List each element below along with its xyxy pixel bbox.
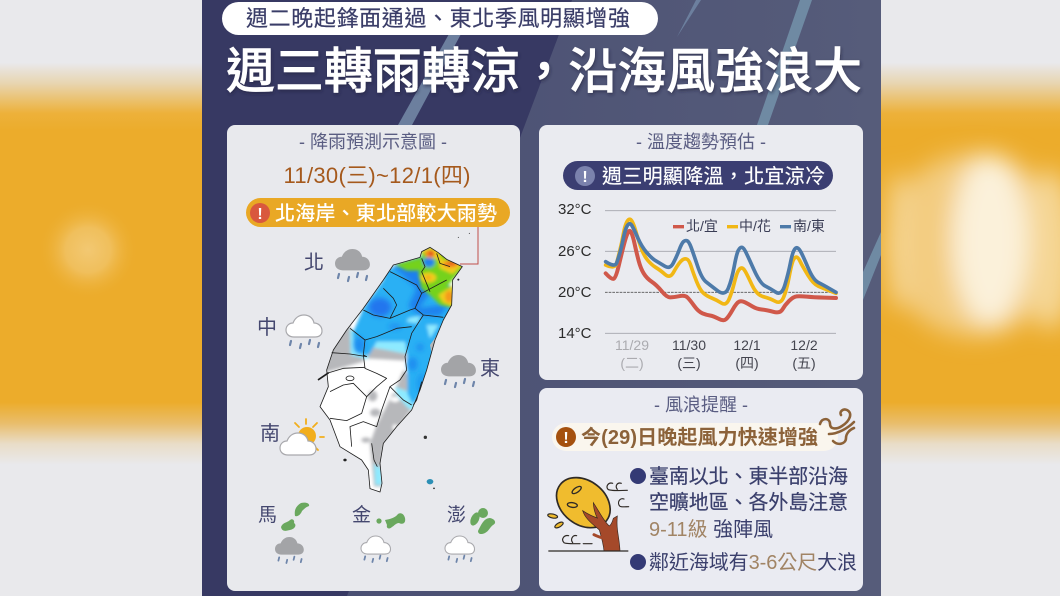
subtitle pill: 週二晚起鋒面通過、東北季風明顯增強 — [246, 6, 630, 31]
icon: central rain cloud — [286, 315, 322, 348]
panel: temperature trend — [539, 125, 863, 380]
date labels: (五) — [792, 355, 816, 371]
date labels: 12/1 — [733, 337, 761, 353]
map of Taiwan with rainfall — [313, 233, 470, 497]
date labels: 11/29 — [615, 337, 649, 353]
chart legend: 南/東 — [793, 218, 825, 234]
icon: wind swirl — [820, 409, 854, 444]
icon: east rain cloud — [441, 355, 476, 387]
axis labels: 26°C — [558, 243, 592, 260]
rainfall alert pill: 北海岸、東北部較大雨勢 — [275, 202, 497, 225]
poster background — [202, 0, 881, 596]
wind warning bullet one: 臺南以北、東半部沿海 — [649, 465, 848, 488]
wind warning bullet one — [630, 465, 848, 541]
panel: wind and waves — [539, 388, 863, 591]
icon: north rain cloud — [335, 249, 370, 281]
series: central/Hualien — [606, 219, 836, 304]
subtitle pill — [222, 2, 658, 35]
rainfall dates: 11/30(三)~12/1(四) — [284, 163, 470, 188]
axis labels — [558, 201, 592, 342]
label: north: 北 — [304, 251, 324, 274]
wind panel heading: - 風浪提醒 - — [654, 395, 748, 415]
series: south/Taitung — [606, 224, 836, 293]
icon: Matsu islands — [281, 503, 309, 531]
date labels: (三) — [677, 355, 701, 371]
wind warning bullet one: 9-11級 強陣風 — [649, 518, 773, 541]
rainfall panel heading: - 降雨預測示意圖 - — [299, 132, 447, 152]
axis labels: 20°C — [558, 284, 592, 301]
icon: tree in wind — [547, 467, 629, 551]
wind alert pill: 今(29)日晚起風力快速增強 — [581, 425, 818, 449]
icon: Penghu cloud — [445, 536, 475, 562]
label: south: 南 — [260, 422, 280, 445]
chart legend — [673, 218, 825, 234]
icon: Kinmen cloud — [361, 536, 391, 562]
temperature alert pill: 週三明顯降溫，北宜涼冷 — [602, 165, 825, 188]
icon: Penghu islands — [468, 508, 495, 534]
temperature alert pill: ! — [582, 169, 588, 186]
chart grid lines — [605, 211, 836, 333]
axis labels: 14°C — [558, 325, 592, 342]
label: central: 中 — [257, 316, 277, 339]
label: Kinmen: 金 — [352, 504, 371, 526]
rainfall alert pill — [246, 198, 510, 227]
wind warning bullet one: 空曠地區、各外島注意 — [649, 491, 848, 514]
chart legend: 中/花 — [739, 218, 771, 234]
chart legend: 北/宜 — [686, 218, 718, 234]
series: north/Yilan — [606, 231, 836, 320]
icon: Matsu cloud — [275, 537, 304, 563]
icon: Kinmen islands — [376, 513, 405, 528]
date labels: (二) — [620, 355, 644, 371]
date labels: 11/30 — [672, 337, 706, 353]
label: Penghu: 澎 — [447, 504, 466, 526]
wind warning bullet two: 鄰近海域有3-6公尺大浪 — [649, 551, 857, 574]
callout line to north coast — [460, 227, 478, 264]
temperature panel heading: - 溫度趨勢預估 - — [636, 132, 766, 152]
left background band — [0, 0, 203, 596]
icon: south sun and cloud — [280, 419, 324, 455]
temperature alert pill — [563, 161, 833, 190]
date labels: (四) — [735, 355, 759, 371]
label: east: 東 — [480, 357, 500, 380]
date labels — [615, 337, 818, 371]
label: Matsu: 馬 — [258, 505, 277, 526]
title: 週三轉雨轉涼，沿海風強浪大 — [226, 45, 862, 99]
rainfall alert pill: ! — [257, 206, 263, 223]
line chart: temperature — [558, 201, 836, 371]
wind alert pill — [552, 423, 838, 451]
axis labels: 32°C — [558, 201, 592, 218]
date labels: 12/2 — [790, 337, 818, 353]
wind alert pill: ! — [563, 430, 569, 447]
panel: rainfall forecast — [227, 125, 520, 591]
right background band — [880, 0, 1060, 596]
